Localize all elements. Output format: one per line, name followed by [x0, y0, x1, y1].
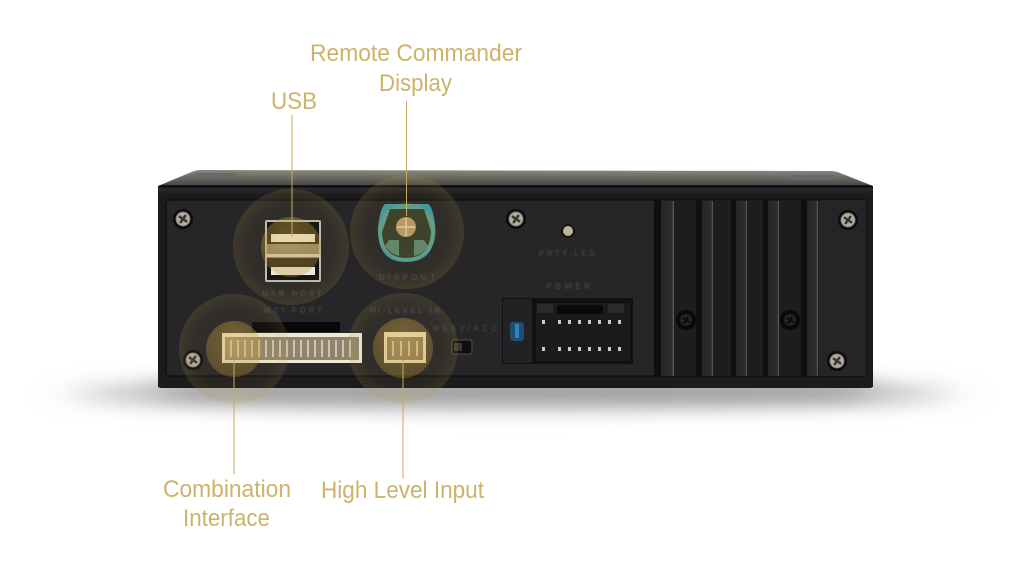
USB port: MCI PORT: [264, 306, 322, 315]
label: Remote Commander Display: Remote Commander: [310, 40, 522, 67]
highlight ring: display: [350, 175, 464, 289]
top face: [158, 170, 873, 186]
switch: HDSY/ACC: [433, 324, 497, 333]
leader line: high level: [402, 360, 404, 479]
label: Combination Interface: Combination: [163, 476, 291, 503]
display connector: DISPOUT: [379, 273, 435, 282]
USB port: USB HOST: [262, 289, 322, 298]
label: Remote Commander Display: [310, 40, 522, 97]
label: USB: USB: [271, 88, 317, 115]
leader line: USB: [291, 115, 293, 237]
floor shadow: [72, 379, 952, 409]
combination interface connector: [222, 322, 362, 363]
highlight ring: high level: [348, 293, 458, 403]
status LED: PRTY-LED: [539, 249, 595, 258]
display connector: [378, 204, 435, 282]
heat sink fins: [654, 200, 866, 376]
label: Combination Interface: Interface: [183, 505, 270, 532]
switch: [433, 324, 497, 354]
label: Remote Commander Display: Display: [379, 70, 452, 97]
high level input connector: [370, 306, 440, 363]
label: High Level Input: High Level Input: [321, 477, 484, 504]
front inset panel: [166, 200, 866, 376]
leader line: display: [406, 101, 408, 216]
status LED: [539, 224, 595, 258]
leader line: combination: [233, 360, 235, 474]
screws: [173, 209, 858, 371]
high level input connector: HI-LEVEL IN: [370, 306, 440, 315]
highlight ring: USB: [233, 189, 349, 305]
label: Combination Interface: [163, 476, 291, 532]
USB port: [262, 220, 322, 315]
device body: [158, 170, 873, 388]
front frame: [158, 185, 873, 388]
power connector: [502, 282, 633, 364]
power connector: POWER: [546, 282, 590, 291]
highlight ring: combination: [179, 294, 289, 404]
